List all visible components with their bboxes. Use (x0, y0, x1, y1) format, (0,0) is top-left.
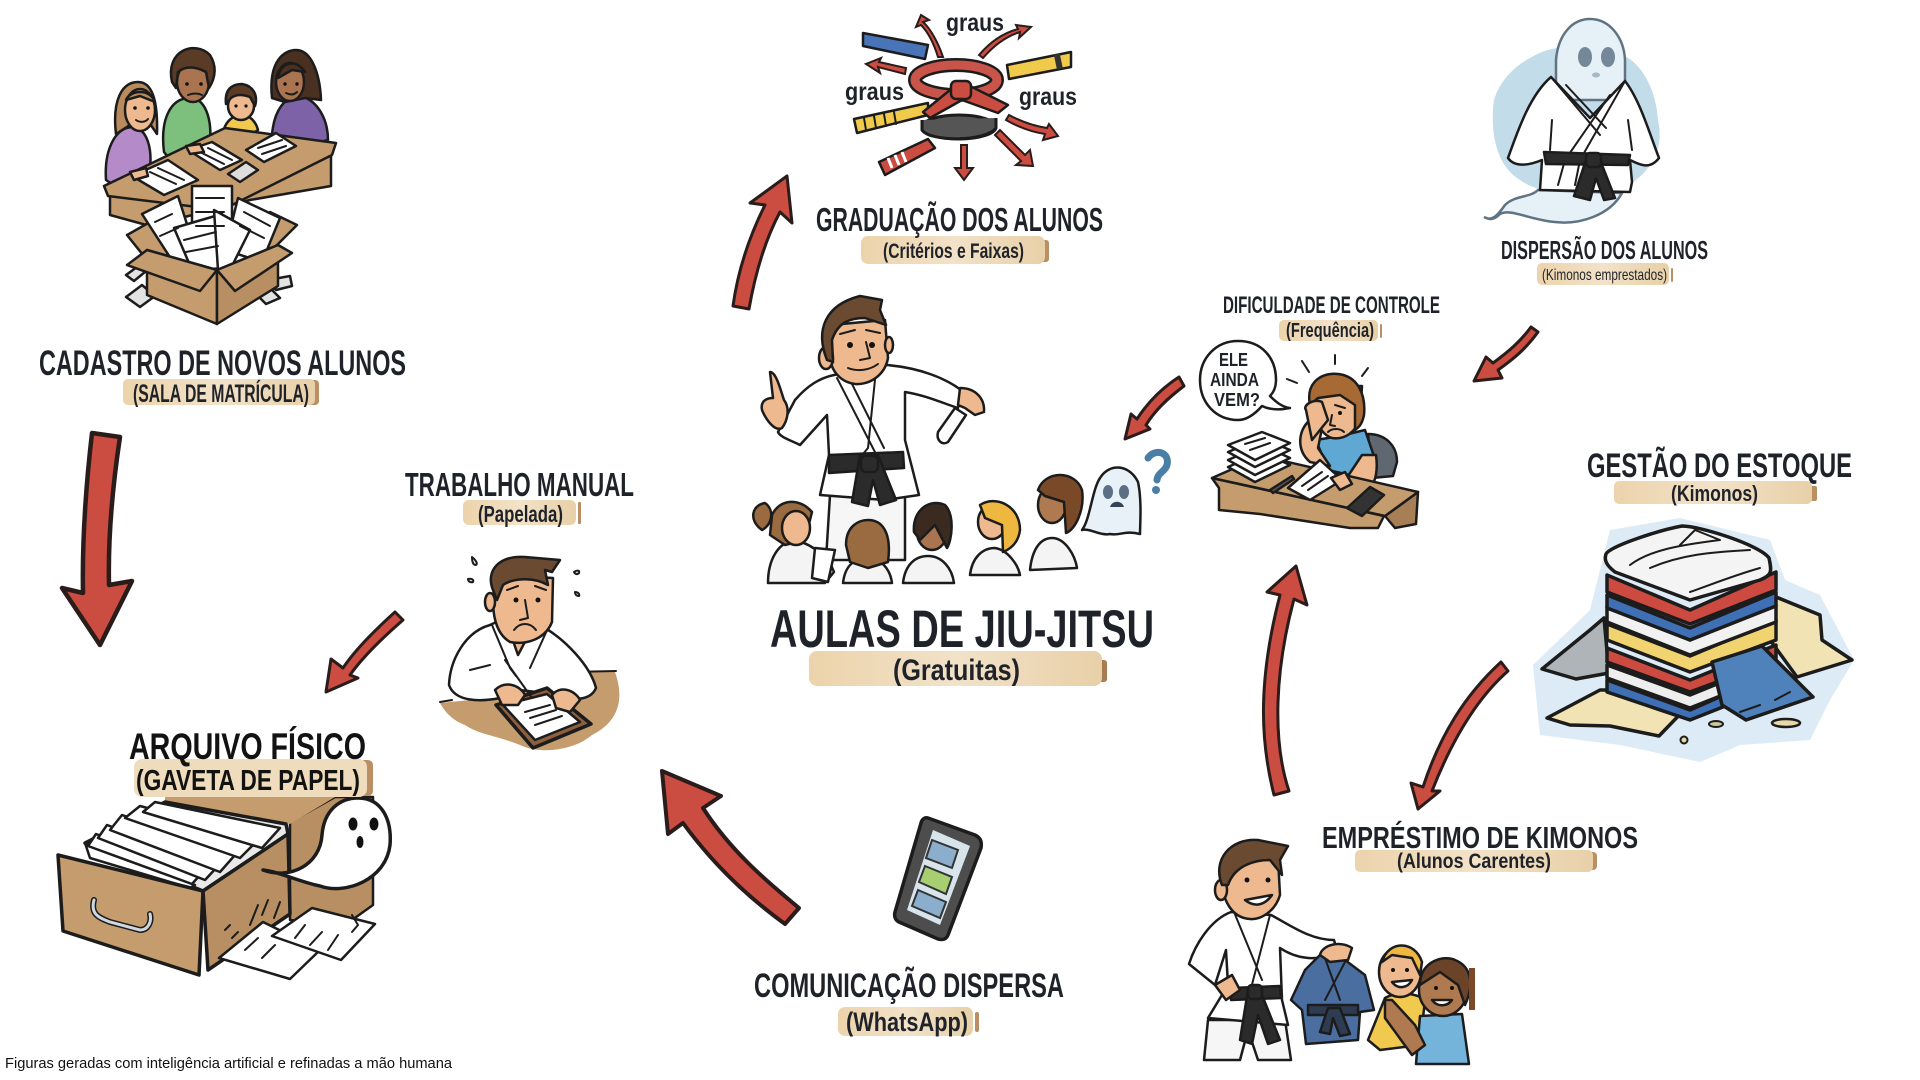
panel: gestão do estoque (1533, 447, 1854, 762)
heading: trabalho manual: TRABALHO MANUAL (405, 466, 634, 503)
icon: instructor lending kimono to kids (1189, 840, 1475, 1064)
badge: gaveta de papel (134, 759, 373, 797)
icon: pile of kimonos (1533, 518, 1854, 762)
arrow: aulas to graduação (733, 176, 792, 309)
subheading: frequência: (Frequência) (1286, 320, 1374, 342)
arrow: empréstimo to dificuldade (1263, 566, 1307, 795)
panel: cadastro de novos alunos (39, 48, 406, 408)
arrow: dispersão to dificuldade (1474, 327, 1538, 381)
callout: speech bubble (1200, 341, 1290, 420)
subheading: sala de matrícula: (SALA DE MATRÍCULA) (133, 379, 309, 408)
arrow: dificuldade to aulas (1125, 377, 1184, 439)
subheading: whatsapp: (WhatsApp) (846, 1007, 968, 1037)
icon: belts with graus arrows (854, 15, 1071, 180)
subheading: gratuitas: (Gratuitas) (893, 654, 1020, 687)
badge: kimonos (1614, 481, 1817, 504)
panel: arquivo físico (58, 726, 390, 979)
icon: open file drawer with ghost (58, 797, 390, 979)
subheading: papelada: (Papelada) (478, 501, 563, 527)
badge: whatsapp (838, 1007, 979, 1036)
icon: family at table with box of papers (104, 48, 336, 324)
subheading: kimonos: (Kimonos) (1671, 481, 1758, 506)
badge: alunos carentes (1355, 850, 1597, 872)
label: graus right: graus (1019, 83, 1077, 111)
panel: empréstimo de kimonos (1189, 820, 1638, 1064)
heading: arquivo físico: ARQUIVO FÍSICO (129, 726, 366, 767)
panel: comunicação dispersa (754, 818, 1064, 1037)
subheading: alunos carentes: (Alunos Carentes) (1397, 850, 1551, 873)
heading: empréstimo de kimonos: EMPRÉSTIMO DE KIMONOS (1322, 820, 1638, 855)
label: graus left: graus (845, 78, 904, 106)
icon: ghost in kimono (1484, 19, 1660, 223)
icon: smartphone with chat bubbles (895, 818, 981, 940)
bubble text line 2: AINDA (1210, 370, 1259, 390)
subheading: kimonos emprestados: (Kimonos emprestados) (1542, 267, 1667, 284)
subheading: gaveta de papel: (GAVETA DE PAPEL) (136, 765, 360, 797)
panel: dispersão dos alunos (1484, 19, 1708, 285)
arrow: estoque to empréstimo (1411, 662, 1508, 809)
bubble text line 1: ELE (1219, 350, 1248, 370)
badge: kimonos emprestados (1537, 263, 1673, 285)
footer note: Figuras geradas com inteligência artificial e refinadas a mão humana (5, 1056, 453, 1072)
panel: graduação dos alunos (816, 9, 1103, 264)
heading: cadastro de novos alunos: CADASTRO DE NOVOS ALUNOS (39, 344, 406, 383)
subheading: critérios e faixas: (Critérios e Faixas) (883, 240, 1024, 263)
badge: frequência (1279, 320, 1382, 341)
arrow: cadastro to arquivo (62, 433, 132, 645)
badge: sala de matrícula (123, 379, 319, 405)
bubble text line 3: VEM? (1214, 390, 1260, 410)
panel: aulas de jiu-jitsu (753, 296, 1167, 687)
panel: trabalho manual (405, 466, 634, 750)
badge: papelada (463, 500, 581, 525)
arrow: comunicação to trabalho manual (662, 771, 799, 924)
heading: graduação dos alunos: GRADUAÇÃO DOS ALUNOS (816, 201, 1103, 238)
heading: comunicação dispersa: COMUNICAÇÃO DISPERSA (754, 967, 1064, 1005)
arrow: trabalho manual to arquivo (326, 612, 403, 692)
label: graus top: graus (946, 9, 1004, 37)
heading: dificuldade de controle: DIFICULDADE DE CONTROLE (1223, 292, 1440, 319)
badge: gratuitas (809, 651, 1107, 686)
panel: dificuldade de controle (1200, 292, 1440, 528)
heading: aulas de jiu-jitsu: AULAS DE JIU-JITSU (770, 600, 1154, 659)
badge: critérios e faixas (861, 236, 1049, 264)
icon: worried man writing on clipboard (440, 557, 619, 750)
icon: instructor with students and ghost (753, 296, 1167, 583)
heading: dispersão dos alunos: DISPERSÃO DOS ALUNOS (1501, 235, 1708, 265)
icon: overwhelmed person at desk (1212, 355, 1418, 528)
